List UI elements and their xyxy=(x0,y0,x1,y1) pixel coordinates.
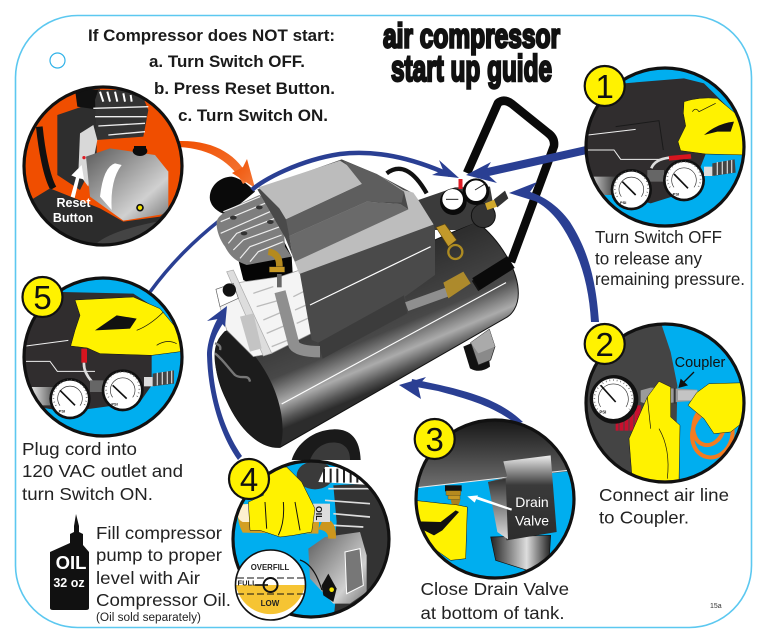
tank underside xyxy=(418,422,568,487)
red knob xyxy=(616,405,641,431)
metal foot bracket xyxy=(488,455,557,540)
fitting xyxy=(90,380,103,392)
caption step 4 xyxy=(96,523,231,624)
yellow fingers xyxy=(414,500,467,560)
left gauge xyxy=(49,378,91,419)
white crankcase xyxy=(216,270,312,357)
caption step 2 xyxy=(599,485,729,528)
coupler body xyxy=(641,388,697,405)
cooling fins xyxy=(93,90,148,140)
caption step 1 xyxy=(595,227,745,289)
caption step 5: Plug cord into xyxy=(22,439,137,459)
title: air compressor xyxy=(383,18,560,56)
crankcase cover xyxy=(100,163,122,210)
glove wrinkle xyxy=(692,103,716,112)
fitting xyxy=(647,170,664,182)
number badge 1 xyxy=(585,66,625,106)
number badge 5 xyxy=(22,277,62,317)
top housing xyxy=(75,89,100,110)
number badge 1: 1 xyxy=(596,68,614,105)
panel: reset button close-up xyxy=(20,87,187,253)
brass elbow fitting xyxy=(268,252,285,272)
troubleshooting instructions xyxy=(88,27,335,125)
oil level inset: FULL xyxy=(238,578,257,588)
bracket lower highlight xyxy=(488,479,508,539)
number badge 4 xyxy=(229,459,269,499)
oil level inset: OVERFILL xyxy=(251,563,290,572)
dark shroud xyxy=(57,102,97,190)
left glove xyxy=(629,381,680,482)
wheel xyxy=(292,429,361,460)
brass hose fitting xyxy=(443,272,471,298)
yellow glove xyxy=(678,98,746,155)
troubleshooting instructions: If Compressor does NOT start: xyxy=(88,27,335,45)
drain valve fitting xyxy=(445,485,462,507)
caption step 4: pump to proper xyxy=(96,545,222,565)
left gauge: PSI xyxy=(59,409,65,414)
caption step 1: Turn Switch OFF xyxy=(595,227,722,247)
lower left highlight xyxy=(30,387,60,405)
panel: step 3 close drain valve: Drain xyxy=(515,494,549,510)
number badge 3 xyxy=(415,419,455,459)
caption step 5 xyxy=(22,439,183,504)
rubber foot xyxy=(491,535,551,570)
fins xyxy=(318,467,377,527)
title xyxy=(383,18,560,89)
orange arrow to reset button xyxy=(178,141,255,188)
air compressor illustration xyxy=(210,159,518,460)
caption step 3: at bottom of tank. xyxy=(420,603,564,623)
arrow to valve xyxy=(467,495,512,511)
caption step 1: to release any xyxy=(595,248,702,268)
panel: step 1 turn switch off xyxy=(581,66,746,226)
oil level inset: LOW xyxy=(261,599,280,608)
dark housing xyxy=(588,78,732,204)
right gauge: PSI xyxy=(673,191,679,196)
panel: step 4 fill oil xyxy=(229,459,393,622)
regulator block xyxy=(418,187,495,230)
caption step 4: Compressor Oil. xyxy=(96,590,231,610)
blue arrow: step 3 to tank xyxy=(399,377,523,424)
number badge 4: 4 xyxy=(240,461,258,498)
troubleshooting instructions: a. Turn Switch OFF. xyxy=(149,53,305,71)
engine shroud xyxy=(257,159,435,359)
number badge 5: 5 xyxy=(33,279,52,316)
housing lines xyxy=(26,340,95,371)
pressure gauges xyxy=(440,178,489,215)
quick coupler xyxy=(704,159,736,176)
yellow glove xyxy=(71,297,183,355)
base xyxy=(33,188,166,244)
caption step 3 xyxy=(420,579,569,623)
muffler xyxy=(210,177,255,215)
blue arrow: step 1 to switch xyxy=(466,146,587,183)
red switch xyxy=(458,179,462,189)
caption step 4: level with Air xyxy=(96,568,200,588)
glove crease xyxy=(704,122,734,135)
right gauge: PSI xyxy=(111,401,118,406)
panel: step 2 connect air line xyxy=(585,322,751,485)
dark engine body xyxy=(333,482,393,622)
caption step 2: Connect air line xyxy=(599,485,729,505)
blue arrow: step 2 to coupler xyxy=(509,182,599,322)
left gauge xyxy=(611,169,652,210)
tank xyxy=(215,222,518,447)
troubleshooting instructions: b. Press Reset Button. xyxy=(154,80,335,98)
quick coupler xyxy=(144,370,174,386)
right gauge xyxy=(102,369,144,411)
number badge 2 xyxy=(585,324,625,364)
regulator knob xyxy=(471,204,495,228)
caption step 4: Fill compressor xyxy=(96,523,222,543)
caption step 5: turn Switch ON. xyxy=(22,484,153,504)
handle xyxy=(467,101,554,284)
caption step 1: remaining pressure. xyxy=(595,269,745,289)
oil label: OIL xyxy=(314,506,324,521)
black crank neck xyxy=(238,240,293,290)
plug cord xyxy=(84,363,92,381)
oil label xyxy=(313,504,330,522)
gauge: PSI xyxy=(599,409,606,414)
white arrow xyxy=(71,165,84,198)
black hose xyxy=(387,169,427,193)
red switch xyxy=(668,154,691,161)
blue arrow: step 4 to crankcase xyxy=(207,306,242,460)
troubleshooting instructions: c. Turn Switch ON. xyxy=(178,107,328,125)
filler cap xyxy=(133,146,147,156)
part code: 15a xyxy=(710,603,722,610)
panel: step 2 connect air line: Coupler xyxy=(675,355,726,371)
dark filter xyxy=(297,461,333,489)
rear foot xyxy=(463,329,495,371)
caption step 4: (Oil sold separately) xyxy=(96,612,201,624)
number badge 3: 3 xyxy=(426,421,444,458)
right gauge xyxy=(663,159,705,201)
oil bottle xyxy=(237,504,320,534)
brass valve and ring xyxy=(436,224,462,259)
blue arrow tail: step 5 behind compressor xyxy=(150,220,220,292)
caption step 5: 120 VAC outlet and xyxy=(22,461,183,481)
oil level inset xyxy=(236,550,322,620)
panel: step 5 plug in and switch on xyxy=(20,277,183,436)
number badge 2: 2 xyxy=(596,326,614,363)
black outlet hose xyxy=(475,265,508,286)
red plug xyxy=(81,349,87,363)
reset button xyxy=(82,156,86,159)
oil pour xyxy=(318,519,336,539)
panel: reset button close-up: Reset xyxy=(56,196,91,210)
icon: oil bottle xyxy=(50,514,89,610)
oil level plug xyxy=(322,574,337,602)
orange coiled hose xyxy=(690,412,735,460)
black frame tube xyxy=(39,127,53,188)
blue arrow: step 5 to switch xyxy=(252,153,450,190)
left gauge: PSI xyxy=(620,200,626,205)
gauge xyxy=(590,375,638,424)
panel: reset button close-up: Button xyxy=(53,211,93,225)
blue arrowhead: step 5 xyxy=(432,160,459,178)
caption step 3: Close Drain Valve xyxy=(420,579,569,599)
coupler arrow xyxy=(678,372,694,388)
panel: step 3 close drain valve xyxy=(411,415,577,578)
grey air tube xyxy=(279,274,448,352)
mounting bracket xyxy=(78,125,97,187)
quick coupler xyxy=(485,191,508,210)
crankcase xyxy=(86,148,168,221)
yellow glove xyxy=(248,467,315,537)
right glove xyxy=(688,383,747,434)
cylinder head xyxy=(217,195,292,265)
lower left highlight xyxy=(594,176,615,195)
drain screw xyxy=(137,205,143,211)
icon: oil bottle: OIL xyxy=(56,552,86,573)
housing lines xyxy=(588,129,661,159)
crankcase xyxy=(308,532,367,604)
punch hole circle xyxy=(50,53,65,68)
caption step 2: to Coupler. xyxy=(599,508,689,528)
icon: oil bottle: 32 oz xyxy=(53,576,85,590)
blue background xyxy=(662,326,740,479)
title: start up guide xyxy=(391,48,552,89)
switch lever xyxy=(651,158,669,168)
dark housing xyxy=(20,292,183,412)
panel: step 3 close drain valve: Valve xyxy=(515,512,549,528)
